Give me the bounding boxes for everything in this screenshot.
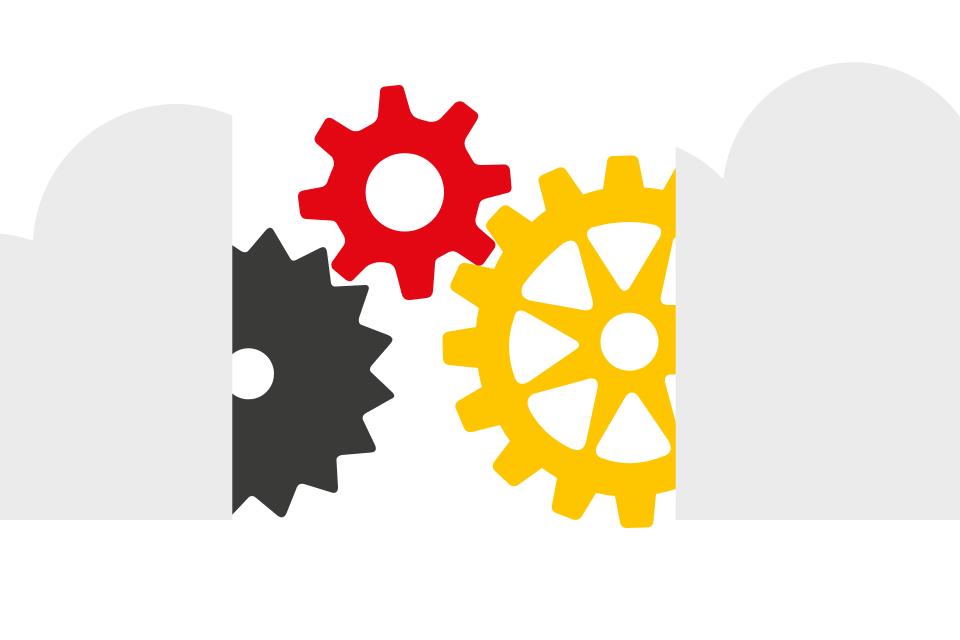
icon: dark sawtooth gear [223,228,394,517]
background: right grey cloud [676,62,960,520]
background: left grey cloud [0,104,232,520]
icon: red gear [298,85,512,300]
icon: yellow spoked gear [442,156,684,528]
